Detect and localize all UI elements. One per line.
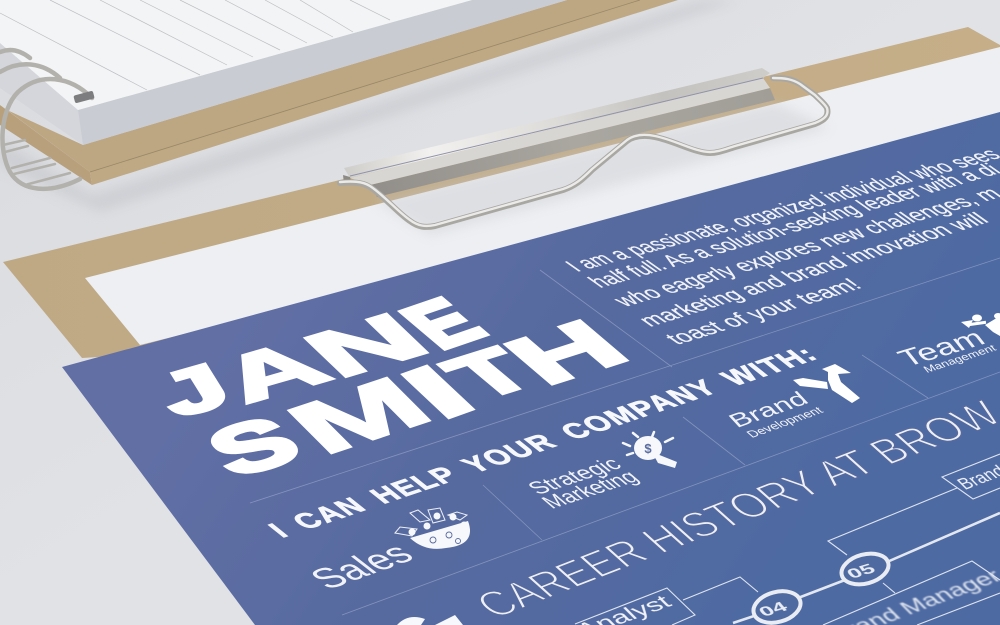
summary paragraph: toast of your team! — [660, 275, 868, 348]
label: Brand Development: Brand — [723, 387, 813, 432]
icon: light bulb — [623, 432, 677, 468]
heading: I can help your company with: I CAN HELP YOUR COMPANY WITH: — [261, 341, 825, 542]
name: JANE: J — [145, 351, 243, 430]
label: Team Management: Management — [921, 343, 1000, 375]
name: JANE: A — [198, 327, 346, 416]
metal clip — [340, 68, 828, 227]
summary paragraph: marketing and brand innovation will — [633, 210, 995, 330]
label: Team Management — [892, 324, 1000, 375]
label: Team Management: Team — [892, 324, 991, 372]
timeline connectors and role boxes — [575, 454, 1000, 625]
name: SMITH: H — [485, 307, 648, 398]
clip wire — [340, 78, 828, 227]
name: SMITH: I — [382, 351, 494, 434]
skill: team management — [892, 313, 1000, 375]
node 04: 04 — [755, 599, 792, 620]
clip bar — [343, 68, 775, 197]
skill: sales — [301, 508, 470, 595]
skill: brand development — [723, 364, 860, 440]
icon: forking arrow — [793, 364, 860, 403]
node 05: 05 — [843, 561, 879, 582]
name: JANE: E — [383, 285, 502, 361]
notebook page stack — [0, 0, 567, 145]
icon: team — [961, 313, 1000, 336]
icon: money bowl — [395, 508, 470, 549]
name: JANE: N — [286, 300, 448, 391]
label: Brand Development — [723, 387, 827, 440]
node 05 — [838, 549, 892, 589]
clipboard board — [3, 27, 1000, 358]
white paper on clipboard — [85, 47, 1000, 345]
label: Brand Development: Development — [743, 404, 827, 440]
name: SMITH: M — [267, 362, 451, 469]
name: SMITH — [192, 307, 648, 491]
notebook cardboard cover — [0, 0, 678, 185]
name: SMITH: S — [192, 403, 316, 491]
clip shadow — [375, 102, 830, 235]
summary paragraph: who eagerly explores new challenges, m — [607, 184, 1000, 311]
label: Strategic Marketing: Strategic — [522, 453, 628, 499]
timeline main line — [733, 513, 1000, 623]
icon: cut off career glyph — [397, 615, 463, 625]
skill: strategic marketing — [522, 432, 677, 513]
label: Sales: Sales — [301, 538, 423, 595]
section dividers — [250, 258, 1000, 615]
label: Strategic Marketing — [522, 453, 644, 513]
notebook spiral rings — [0, 50, 95, 189]
summary paragraph: I am a passionate, organized individual who sees — [560, 145, 1000, 275]
resume sheet — [62, 112, 1000, 625]
notebook — [0, 0, 740, 212]
name: SMITH: T — [426, 336, 553, 411]
name: JANE — [145, 285, 502, 430]
summary paragraph: half full. As a solution-seeking leader with a di — [583, 160, 1000, 291]
node 04 — [750, 586, 804, 625]
summary paragraph — [560, 145, 1000, 348]
label: Strategic Marketing: Marketing — [536, 467, 644, 513]
icon: light bulb: $ — [644, 441, 652, 456]
notebook shadow — [0, 0, 740, 212]
career timeline — [571, 454, 1000, 625]
